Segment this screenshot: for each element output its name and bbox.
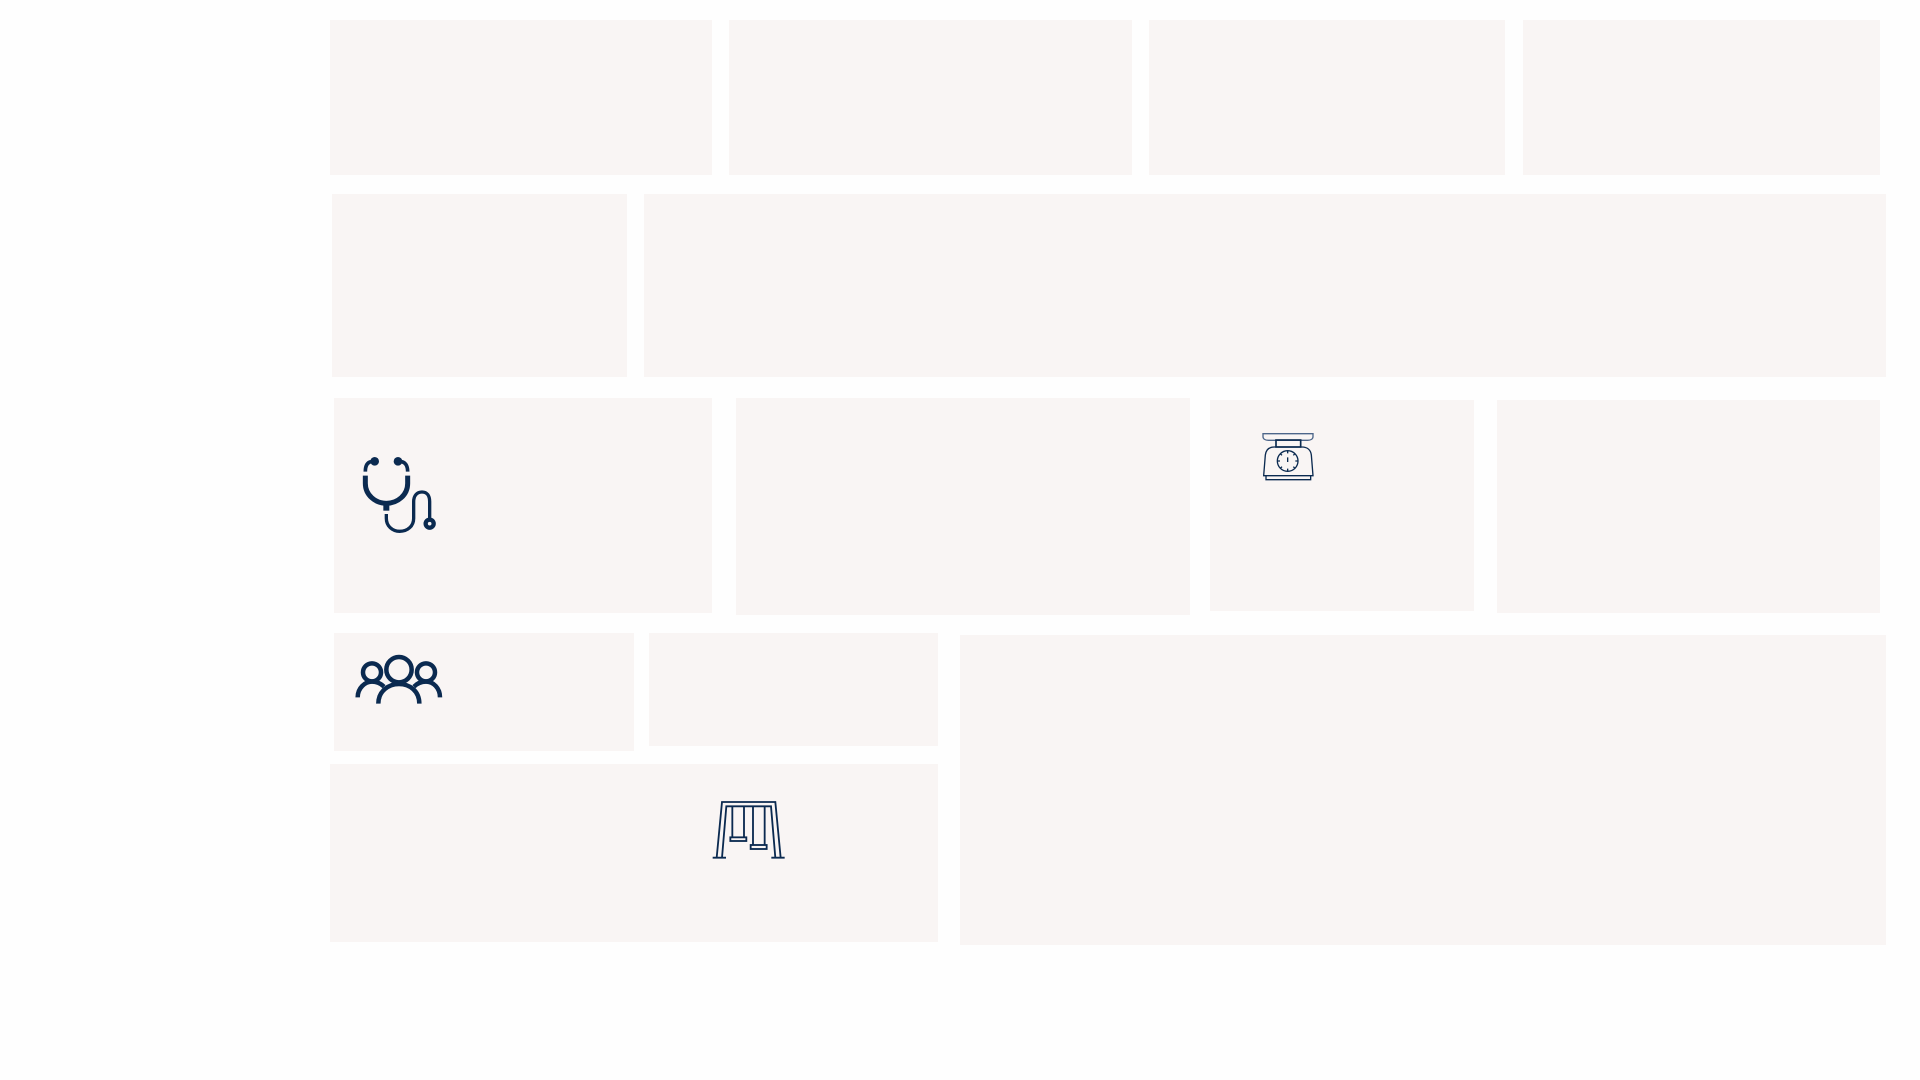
icon: group of people <box>355 654 442 704</box>
panel: centre card <box>736 398 1190 615</box>
icon: stethoscope <box>362 457 436 533</box>
panel: small middle card <box>649 633 938 746</box>
panel: right card <box>1497 400 1880 613</box>
panel: people card <box>334 633 634 751</box>
panel: row 1 third <box>1149 20 1505 175</box>
panel: swing card <box>330 764 938 942</box>
icon: swing set <box>712 801 785 859</box>
panel: row 2 left <box>332 194 627 377</box>
icon: weighing scale <box>1262 433 1314 480</box>
panel: weighing scale card <box>1210 400 1474 611</box>
panel: row 1 second <box>729 20 1132 175</box>
panel: row 2 wide <box>644 194 1886 377</box>
panel: row 1 fourth <box>1523 20 1880 175</box>
panel: large lower right <box>960 635 1886 945</box>
panel: stethoscope card <box>334 398 712 613</box>
panel: row 1 first <box>330 20 712 175</box>
